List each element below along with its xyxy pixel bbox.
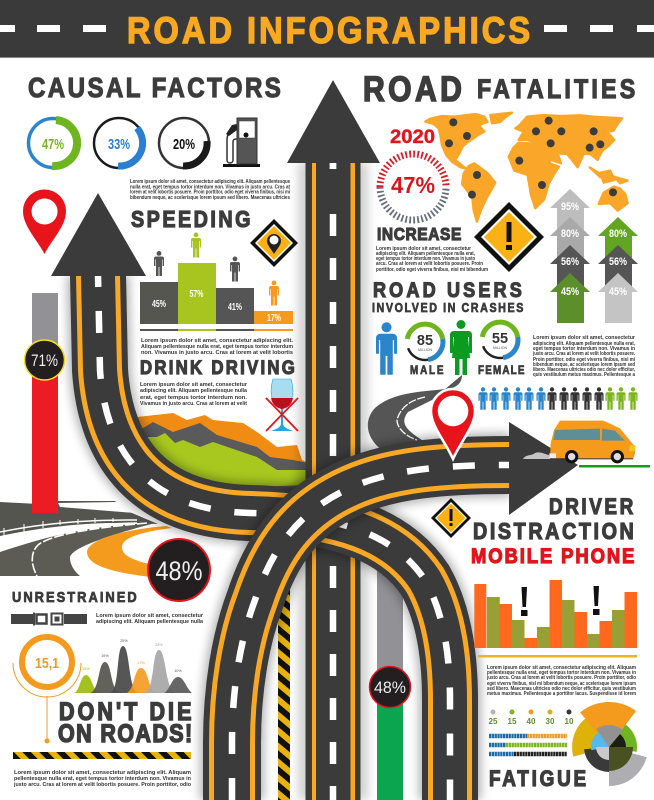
hazard strip horizontal: [13, 752, 191, 759]
bar chart: speeding: 57%: [190, 289, 204, 300]
heading: road fatalities: FATALITIES: [477, 74, 635, 104]
arrows: left column: 95%: [561, 201, 579, 213]
ring: 85 million: MILLION: [418, 348, 432, 352]
pie chart: fatigue: [572, 702, 647, 786]
peak chart: 17%: [137, 661, 145, 665]
text block: mobile phone: Lorem ipsum dolor sit amet, consectetur adipiscing elit. Aliquam: [487, 665, 636, 671]
text block: drink driving: [140, 382, 248, 407]
bar chart: speeding: [140, 232, 293, 331]
circle: 48 percent: 48%: [156, 556, 202, 586]
title: ROAD INFOGRAPHICS: [127, 10, 530, 51]
icon: female figure: [446, 320, 476, 375]
arrows: left column: 80%: [561, 228, 579, 240]
arrows: left column: 45%: [561, 286, 579, 298]
text block: drink driving: erat, eget tempus tortor interdum non.: [140, 395, 248, 401]
arrowhead: right road: [509, 422, 578, 515]
icon: fuel pump: [223, 118, 260, 167]
icon: orange van: [549, 421, 635, 463]
legend: fatigue: [489, 710, 574, 726]
peak chart: 25%: [120, 639, 128, 643]
roadside landscape: [0, 501, 172, 577]
slogan: don't die on roads: [58, 697, 192, 747]
text block: causal factors: [130, 179, 290, 201]
world map: [425, 113, 628, 222]
drink driving landscape: [137, 413, 308, 500]
ring: 55 million: MILLION: [493, 346, 507, 350]
bar: 48 percent: [370, 540, 410, 800]
peak chart: 10%: [174, 669, 182, 673]
text block: bottom left: Lorem ipsum dolor sit amet, consectetur adipiscing elit. Aliquam: [14, 770, 191, 776]
bar chart: speeding: 45%: [152, 299, 166, 310]
heading: road fatalities: [363, 69, 635, 109]
heading: road fatalities: ROAD: [363, 69, 462, 109]
label: female: FEMALE: [478, 364, 524, 377]
slogan: don't die on roads: DON'T DIE: [59, 697, 191, 725]
arrows: left column: 56%: [561, 256, 579, 268]
text block: bottom left: pellentesque nulla erat, eget tempus tortor interdum non. Vivamus in: [14, 776, 191, 782]
ring: 33 percent: 33%: [108, 136, 130, 153]
text block: causal factors: nulla erat, eget tempus tortor interdum non. Vivamus in justo arcu. Cras at: [130, 184, 290, 190]
icon: warning sign: [474, 202, 544, 272]
ring: 33 percent: [94, 118, 144, 168]
heading: fatigue: FATIGUE: [489, 767, 586, 791]
ring: 47 percent: 47%: [42, 136, 64, 153]
peak chart: 15%: [82, 667, 90, 671]
text block: increase: arcu. Cras at lorem at velit lobortis posuere. Proin: [376, 261, 483, 267]
text block: increase: eget tempus tortor interdum non. Vivamus in justo: [376, 256, 475, 262]
arrows: right column: 45%: [609, 286, 627, 298]
van wheels: [565, 450, 624, 463]
heading: road users: INVOLVED IN CRASHES: [372, 301, 524, 315]
text block: road users: Proin porttitor, odio eget viverra finibus, nisl mi: [533, 357, 635, 363]
ring: 47 percent: [28, 118, 78, 168]
exclamation marks: [521, 586, 600, 616]
ring: 85 million: [407, 324, 443, 360]
ground line: [579, 465, 650, 468]
year label: 2020: [390, 127, 435, 148]
text block: causal factors: Lorem ipsum dolor sit amet, consectetur adipiscing elit. Aliquam pellentesque: [130, 179, 290, 185]
icon: yellow location sign: [250, 219, 298, 267]
gauge: 15,1: [13, 637, 81, 744]
icon: seat belt: [11, 612, 87, 626]
arrows: left column: [550, 189, 590, 323]
central road going up: [287, 80, 380, 800]
gauge: 15,1: 15,1: [35, 656, 59, 672]
arrows: right column: [598, 217, 638, 323]
legend: fatigue: 15: [508, 717, 517, 726]
text block: drink driving: adipiscing elit. Aliquam pellentesque nulla: [140, 388, 247, 394]
map pin: red: [23, 190, 66, 254]
pictogram row: people: [478, 387, 638, 410]
text block: road users: Lorem ipsum dolor sit amet, consectetur: [533, 335, 635, 341]
map markers: [445, 117, 617, 199]
text block: bottom left: [13, 770, 191, 788]
text block: speeding: Lorem ipsum dolor sit amet, consectetur adipiscing elit.: [141, 338, 294, 344]
right-pointing road with arrow: [232, 422, 578, 800]
text block: unrestrained: adipiscing elit. Aliquam pellentesque nulla: [96, 619, 203, 625]
bar: 71 percent: 71%: [31, 351, 58, 370]
ring: 55 million: 55: [492, 331, 508, 347]
text block: unrestrained: [96, 613, 203, 625]
ring: 20 percent: [159, 118, 209, 168]
icon: male figure: [376, 322, 397, 375]
text block: road users: [532, 335, 635, 378]
heading: drink driving: DRINK DRIVING: [140, 357, 295, 378]
bar: 71 percent: [24, 293, 64, 513]
text block: speeding: [141, 338, 294, 356]
people on bars: [154, 232, 279, 306]
ring: 85 million: 85: [417, 333, 433, 349]
text block: increase: [376, 246, 488, 273]
text block: road users: libero. Maecenas ultricies odio nec dolor efficitur,: [533, 367, 635, 373]
text block: causal factors: lorem at velit lobortis posuere. Proin porttitor, odio eget viverra finibus, nisi mi: [130, 190, 290, 196]
text block: bottom left: justo arcu. Cras at lorem at velit lobortis posuere. Proin porttitor, odio: [13, 782, 191, 788]
text block: road users: eget tempus tortor interdum non. Vivamus in: [533, 346, 635, 352]
text block: drink driving: Lorem ipsum dolor sit amet, consectetur: [140, 382, 247, 388]
text block: increase: adipiscing elit. Aliquam pellentesque nulla erat,: [376, 251, 475, 257]
icon: small warning sign: [431, 498, 471, 538]
legend: fatigue: 10: [565, 717, 574, 726]
icon: crossed wine glass: [266, 379, 298, 431]
legend: fatigue: 25: [489, 717, 498, 726]
icon: dust cloud: [523, 452, 550, 459]
heading: driver distraction: DRIVER: [549, 495, 633, 519]
text block: road users: justo arcu. Cras at lorem at velit lobortis posuere.: [532, 351, 635, 357]
heading: increase: INCREASE: [377, 224, 461, 244]
map pin: on road: [431, 389, 475, 459]
peak chart: 19%: [101, 654, 109, 658]
text block: mobile phone: metus maximus. Pellentesque a porttitor lacus. Suspendisse id lorem: [487, 691, 636, 697]
text block: increase: Lorem ipsum dolor sit amet, consectetur: [376, 246, 471, 252]
gauge: 47 percent: 47%: [391, 172, 435, 198]
back road behind the pin: [368, 375, 462, 450]
progress bars: fatigue: [489, 736, 567, 754]
header band: [0, 0, 654, 58]
text block: unrestrained: Lorem ipsum dolor sit amet, consectetur: [96, 613, 203, 619]
hazard strip vertical: [278, 584, 290, 800]
ring: 55 million: [482, 322, 518, 358]
heading: driver distraction: MOBILE PHONE: [471, 545, 634, 568]
text block: mobile phone: pellentesque nulla erat, eget tempus tortor interdum non. Vivamus in: [487, 670, 636, 676]
arrowhead: left road: [51, 193, 146, 276]
heading: road users: [372, 279, 524, 315]
legend: fatigue: 30: [546, 717, 555, 726]
arrowhead: central road: [287, 80, 380, 163]
text block: speeding: non. Vivamus in justo arcu. Cras at lorem at velit lobortis: [141, 350, 293, 356]
bar chart: mobile phone: [474, 580, 637, 658]
heading: speeding: SPEEDING: [131, 207, 251, 232]
text block: drink driving: Vivamus in justo arcu. Cras at lorem at velit: [140, 401, 247, 407]
label: male: MALE: [410, 364, 444, 377]
arrows: right column: 80%: [609, 228, 627, 240]
text block: speeding: Aliquam pellentesque nulla erat, eget tempus tortor interdum: [141, 344, 293, 350]
text block: road users: adipiscing elit. Aliquam pellentesque nulla erat,: [533, 341, 635, 347]
heading: causal factors: CAUSAL FACTORS: [28, 71, 281, 103]
bar chart: speeding: 17%: [267, 313, 281, 324]
heading: road users: ROAD USERS: [373, 279, 522, 302]
heading: driver distraction: DISTRACTION: [473, 519, 634, 544]
S-curved road with left arrow: [51, 193, 450, 800]
text block: road users: bibendum neque, ac scelerisque lorem ipsum sed: [533, 362, 635, 368]
text block: mobile phone: [486, 665, 636, 697]
arrows: right column: 56%: [609, 256, 627, 268]
peak chart: [73, 639, 192, 693]
peak chart: 23%: [155, 643, 163, 647]
text block: road users: quis vestibulum metus maximus. Pellentesque a: [533, 372, 635, 378]
heading: driver distraction: [471, 495, 634, 568]
bar chart: speeding: 41%: [228, 302, 242, 313]
heading: unrestrained: UNRESTRAINED: [12, 588, 137, 605]
gauge: 47 percent: [380, 154, 446, 220]
text block: increase: porttitor, odio eget viverra finibus, nisl mi bibendum: [376, 267, 488, 273]
ring: 20 percent: 20%: [173, 136, 195, 153]
text block: mobile phone: justo arcu. Cras at lorem at velit lobortis posuere. Proin porttitor, odio: [486, 675, 636, 681]
legend: fatigue: 40: [527, 717, 536, 726]
circle: 48 percent: [148, 539, 210, 601]
text block: causal factors: bibendum neque, ac scelerisque lorem ipsum sed libero. Maecenas ultricies: [130, 195, 290, 201]
bar: 48 percent: 48%: [374, 678, 406, 697]
slogan: don't die on roads: ON ROADS!: [58, 719, 192, 747]
